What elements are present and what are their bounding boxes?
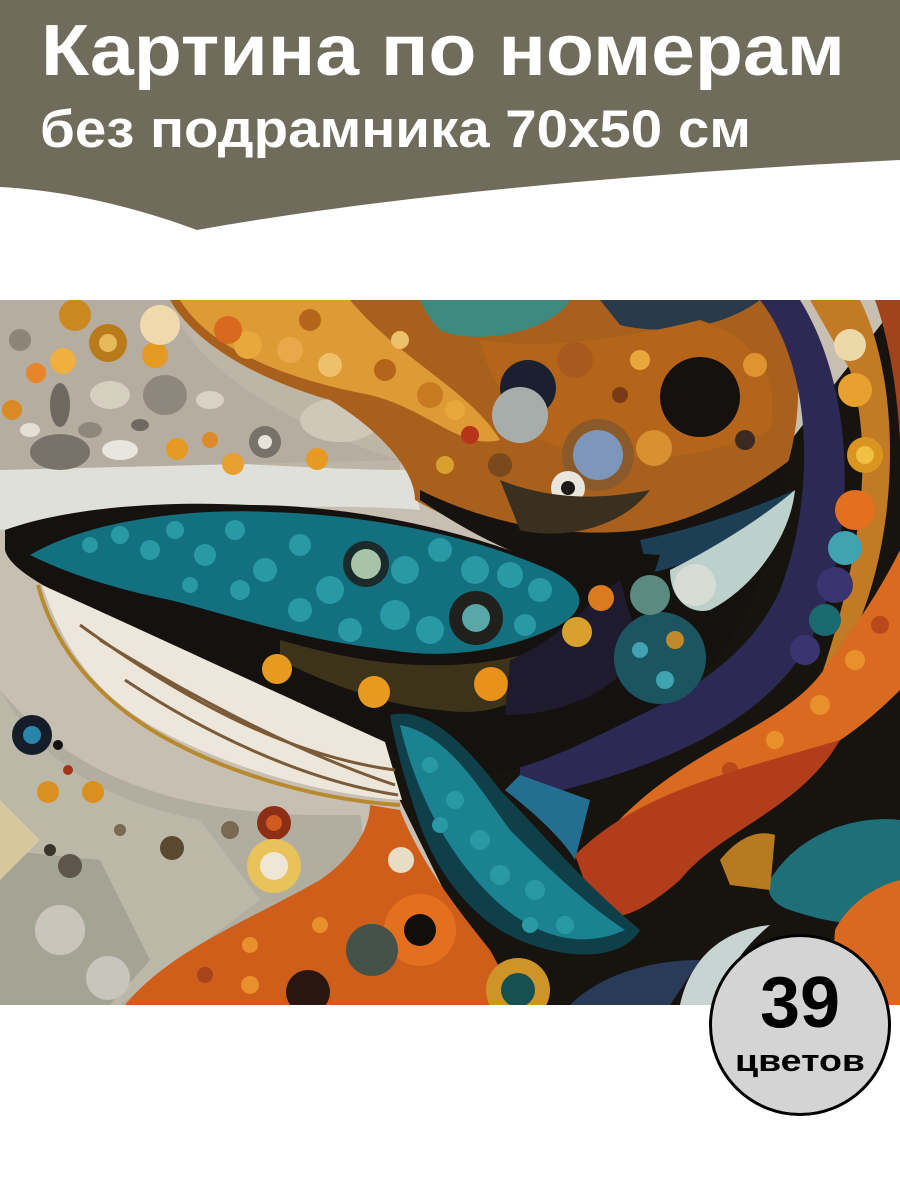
golden upper swirl (170, 300, 798, 581)
subtitle: без подрамника 70х50 см (40, 100, 751, 159)
painting background (0, 300, 900, 1005)
lower orange shape (125, 805, 700, 1022)
dark lower-right base (380, 300, 900, 1005)
title: Картина по номерам (41, 11, 845, 91)
whale eye (449, 591, 503, 645)
whale body (5, 490, 795, 805)
teal back (30, 511, 579, 654)
header banner (0, 0, 900, 230)
whale flipper (390, 714, 640, 954)
speckled upper-left background (0, 299, 420, 530)
badge: 39 colours (710, 936, 890, 1114)
gold spots (262, 654, 292, 684)
right decorative bands (520, 300, 900, 1005)
belly (42, 585, 402, 800)
painting: whale (0, 299, 900, 1022)
gold patch (280, 640, 540, 712)
badge label: цветов (735, 1043, 865, 1078)
lower-left speckled background (0, 690, 362, 1005)
badge number: 39 (760, 963, 840, 1043)
